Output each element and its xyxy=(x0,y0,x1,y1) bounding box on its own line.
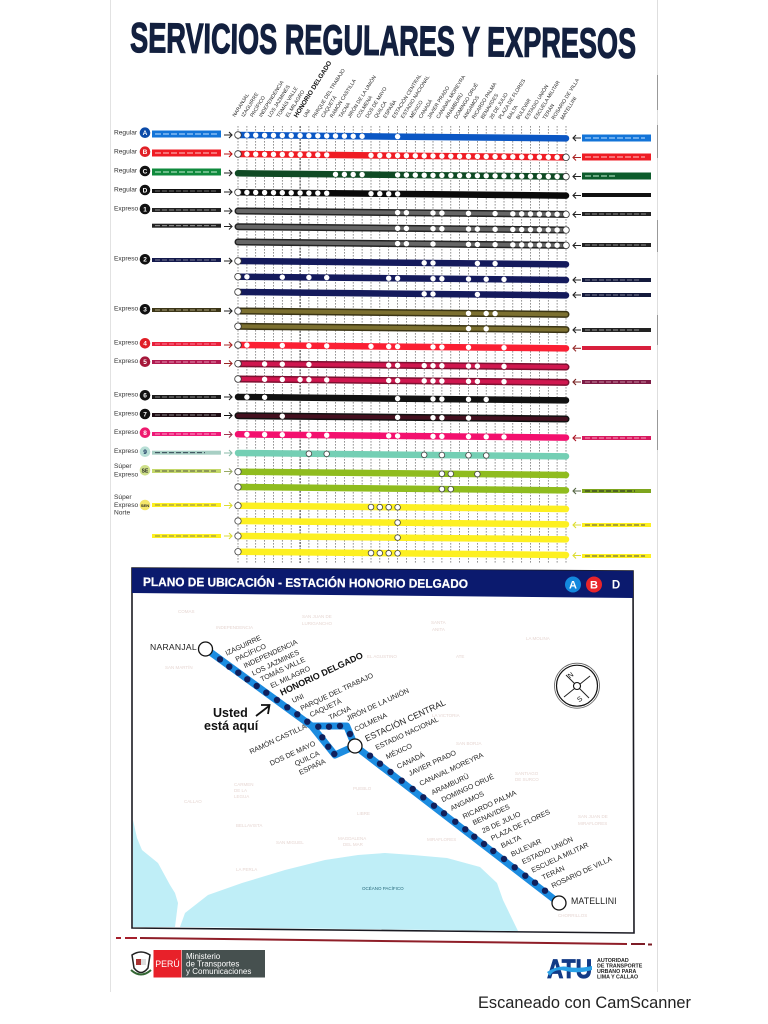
faint district names: MIRAFLORES xyxy=(427,837,456,842)
station column headings xyxy=(232,60,581,121)
map station labels: RAMÓN CASTILLA xyxy=(248,722,308,756)
map station labels: DOS DE MAYO xyxy=(269,739,317,768)
right arrows xyxy=(573,135,581,558)
line B xyxy=(235,151,569,161)
label Super Expreso: Súper xyxy=(114,463,132,470)
map station labels: JIRÓN DE LA UNIÓN xyxy=(345,686,410,723)
label Expreso 8: Expreso xyxy=(114,429,139,436)
map route line xyxy=(198,642,566,910)
station column headings: NARANJAL xyxy=(232,92,251,118)
station column headings: TERÁN xyxy=(541,102,556,121)
label Super Expreso Norte: Norte xyxy=(114,510,130,516)
station column headings: MÉXICO xyxy=(408,99,425,120)
label Expreso 5: 5 xyxy=(143,359,147,366)
express 5 line b xyxy=(235,376,566,386)
express 1 line c xyxy=(238,239,569,249)
label Regular B: Regular xyxy=(114,148,138,156)
map station labels: PACÍFICO xyxy=(234,641,268,664)
logo: ATU xyxy=(547,954,643,984)
label Regular C: Regular xyxy=(114,168,138,174)
station column headings: CANAVAL MOREYRA xyxy=(436,74,467,120)
line A xyxy=(235,132,566,142)
faint district names: SANTIAGO xyxy=(515,771,539,776)
station column headings: INDEPENDENCIA xyxy=(258,79,286,119)
label Regular D: D xyxy=(143,187,148,194)
label Expreso 4: 4 xyxy=(143,341,147,348)
map station labels: PLAZA DE FLORES xyxy=(490,808,552,843)
faint district names: MAGDALENA xyxy=(338,836,366,841)
express 2 line b xyxy=(235,273,566,283)
station column headings: ESPAÑA xyxy=(381,98,398,120)
station column headings: ESTADIO UNIÓN xyxy=(523,83,550,121)
map station labels: DOMINGO ORUÉ xyxy=(440,772,496,804)
label Super Expreso Norte: Expreso xyxy=(114,502,139,509)
station column headings: 28 DE JULIO xyxy=(489,92,510,121)
panel: location map xyxy=(132,568,634,933)
station column headings: TOMÁS VALLE xyxy=(275,85,300,119)
line C xyxy=(238,170,569,180)
map station labels: UNI xyxy=(291,692,305,705)
faint district names: LURIGANCHO xyxy=(302,621,333,626)
map station labels xyxy=(150,634,617,906)
logo: ATU: URBANO PARA xyxy=(597,969,637,975)
station column headings: QUILCA xyxy=(373,100,389,120)
label Regular A: A xyxy=(143,130,148,137)
station column headings: EL MILAGRO xyxy=(285,89,306,119)
faint district names: ANITA xyxy=(432,627,445,632)
label Expreso 9: 9 xyxy=(143,449,147,456)
express 3 line a xyxy=(235,308,566,318)
map station labels: HONORIO DELGADO xyxy=(278,650,365,698)
label Expreso 3: 3 xyxy=(143,307,147,314)
station column headings: ESTADIO NACIONAL xyxy=(400,75,431,120)
label Regular B: B xyxy=(143,149,148,156)
map station labels: ANGAMOS xyxy=(449,790,486,813)
faint district names: BELLAVISTA xyxy=(236,823,262,828)
faint district names: SAN MIGUEL xyxy=(276,840,304,845)
logo: ATU: ATU xyxy=(547,954,592,984)
express 7 line xyxy=(238,413,566,422)
label Expreso 2: 2 xyxy=(143,257,147,264)
map station labels: ARAMBURÚ xyxy=(430,771,470,797)
faint district names: SAN JUAN DE xyxy=(578,814,608,819)
map station labels: BENAVIDES xyxy=(471,803,511,827)
station column headings: UNI xyxy=(303,108,312,119)
map station labels: CANADÁ xyxy=(395,750,426,771)
map header: B xyxy=(590,580,598,592)
label Expreso 9 xyxy=(114,446,150,457)
faint district names: SANTA xyxy=(431,620,446,625)
map header xyxy=(132,568,633,598)
faint district names: LIBRE xyxy=(357,811,370,816)
label Super Expreso: SE xyxy=(142,468,149,474)
map station labels: ESTADIO NACIONAL xyxy=(374,715,440,752)
map station labels: ROSARIO DE VILLA xyxy=(550,855,613,890)
super express norte line c xyxy=(235,533,566,543)
faint district names xyxy=(165,609,608,918)
station column headings: ESCUELA MILITAR xyxy=(533,80,562,121)
station column headings: RICARDO PALMA xyxy=(471,81,499,120)
scanner watermark: Escaneado con CamScanner xyxy=(478,993,691,1012)
faint district names: COMAS xyxy=(178,609,195,614)
map station labels: CAQUETÁ xyxy=(308,696,343,719)
super express norte line a xyxy=(235,502,566,512)
faint district names: CHORRILLOS xyxy=(558,913,587,918)
icon: coat of arms xyxy=(131,952,151,974)
map station labels: ESTADIO UNIÓN xyxy=(520,835,574,866)
compass: N xyxy=(567,671,575,680)
label Expreso 1: Expreso xyxy=(114,206,139,212)
faint district names: DEL MAR xyxy=(343,842,364,847)
super express line b xyxy=(235,484,566,494)
label Super Expreso: Expreso xyxy=(114,472,139,478)
label Expreso 6: Expreso xyxy=(114,392,139,398)
map header: A xyxy=(569,580,577,592)
label Regular A: Regular xyxy=(114,130,138,136)
faint district names: LA PERLA xyxy=(236,867,257,872)
station column headings: MATELLINI xyxy=(560,96,578,121)
express 1 line a xyxy=(238,208,569,218)
label Expreso 9: Expreso xyxy=(114,448,139,455)
label Regular B xyxy=(114,146,150,157)
compass: S xyxy=(576,695,584,704)
logo: Ministerio de Transportes: Ministerio xyxy=(186,952,221,961)
logo: Ministerio de Transportes: PERÚ xyxy=(155,959,180,969)
label Super Expreso Norte xyxy=(114,494,150,516)
station column headings: DOMINGO ORUÉ xyxy=(452,81,480,120)
station column headings: CAQUETÁ xyxy=(319,94,339,119)
callout: you are here: está aquí xyxy=(204,719,259,733)
logo: ATU: AUTORIDAD xyxy=(597,958,629,964)
map station labels: IZAGUIRRE xyxy=(224,634,263,658)
map station labels: CANAVAL MOREYRA xyxy=(418,751,485,788)
station column headings: LOS JAZMINES xyxy=(267,84,292,119)
station column headings: CANADÁ xyxy=(417,98,434,120)
label Expreso 7: Expreso xyxy=(114,410,139,418)
map station labels: EL MILAGRO xyxy=(269,664,312,690)
map station labels: BULEVAR xyxy=(510,837,543,859)
faint district names: MIRAFLORES xyxy=(578,821,607,826)
logo: Ministerio de Transportes: de Transportes xyxy=(186,960,239,968)
faint district names: OCÉANO PACÍFICO xyxy=(362,885,404,891)
left arrows xyxy=(224,132,232,539)
label Expreso 3: Expreso xyxy=(114,306,139,312)
route lines and stops xyxy=(235,132,569,558)
express 3 line b xyxy=(235,323,566,333)
super express line a xyxy=(235,468,566,478)
map station labels: RICARDO PALMA xyxy=(461,789,518,821)
express 1 line b xyxy=(238,223,569,233)
map station labels: ESTACIÓN CENTRAL xyxy=(363,697,447,744)
callout: you are here: Usted xyxy=(213,706,248,720)
station column headings: PARQUE DEL TRABAJO xyxy=(311,68,347,120)
station column headings: COLMENA xyxy=(356,94,374,119)
label Expreso 4 xyxy=(114,338,150,349)
label Expreso 2 xyxy=(114,254,150,265)
map station labels: TACNA xyxy=(327,705,352,722)
map station labels: ESPAÑA xyxy=(297,757,327,777)
footer divider xyxy=(116,938,652,944)
station column headings: ARAMBURÚ xyxy=(444,91,465,120)
faint district names: SAN BORJA xyxy=(456,741,482,746)
label Regular C: C xyxy=(143,168,148,175)
express 5 line a xyxy=(235,360,566,370)
faint district names: LA VICTORIA xyxy=(432,713,460,718)
faint district names: PUEBLO xyxy=(353,786,372,791)
right destination bars xyxy=(582,134,651,558)
label Expreso 7: 7 xyxy=(143,411,147,418)
super express norte line d xyxy=(235,548,566,558)
label Expreso 1: 1 xyxy=(143,206,147,213)
label Expreso 6 xyxy=(114,390,150,401)
faint district names: DE LA xyxy=(234,788,247,793)
station column headings: HONORIO DELGADO xyxy=(293,60,333,119)
label Expreso 5: Expreso xyxy=(114,358,139,365)
station column headings: IZAGUIRRE xyxy=(241,91,261,118)
label Expreso 5 xyxy=(114,356,150,367)
label Expreso 8 xyxy=(114,427,150,438)
map station labels: COLMENA xyxy=(353,711,389,734)
sea xyxy=(133,820,518,931)
station column headings: JAVIER PRADO xyxy=(427,85,451,120)
faint district names: DE SURCO xyxy=(515,777,539,782)
faint district names: SAN JUAN DE xyxy=(302,614,332,619)
logo: ATU: LIMA Y CALLAO xyxy=(597,974,638,980)
map station labels: TOMÁS VALLE xyxy=(259,655,307,684)
express 2 line a xyxy=(235,258,566,268)
map station labels: MÉXICO xyxy=(384,741,414,761)
map station labels: JAVIER PRADO xyxy=(407,749,458,778)
station column headings: ANGAMOS xyxy=(462,94,481,120)
express 2 line c xyxy=(235,289,566,299)
compass xyxy=(554,663,600,708)
service labels and badges xyxy=(114,127,150,516)
faint district names: CALLAO xyxy=(184,799,202,804)
station column headings: PACÍFICO xyxy=(248,95,267,118)
logo: Ministerio de Transportes xyxy=(131,950,265,978)
map station labels: 28 DE JULIO xyxy=(481,810,522,835)
express 9 line xyxy=(238,450,566,459)
express 4 line xyxy=(235,342,566,352)
map station labels: NARANJAL xyxy=(150,642,197,652)
station column headings: JIRÓN DE LA UNIÓN xyxy=(346,74,378,119)
station column headings: BALTA xyxy=(506,104,520,121)
station column headings: ESTACIÓN CENTRAL xyxy=(390,73,423,120)
map station labels: MATELLINI xyxy=(571,896,617,906)
express 6 line xyxy=(238,394,566,403)
label Super Expreso xyxy=(114,463,150,478)
faint district names: CARMEN xyxy=(234,782,254,787)
express 8 line xyxy=(238,432,566,440)
faint district names: LEGUA xyxy=(234,794,249,799)
callout: you are here xyxy=(204,705,270,733)
map station labels: PARQUE DEL TRABAJO xyxy=(299,671,375,713)
station column headings: PLAZA DE FLORES xyxy=(498,78,527,121)
map header: PLANO DE UBICACIÓN - ESTACIÓN HONORIO DELGADO xyxy=(143,574,468,591)
station column headings: BULEVAR xyxy=(515,97,533,121)
station column headings: TACNA xyxy=(338,101,352,119)
faint district names: ATE xyxy=(456,654,464,659)
map station labels: BALTA xyxy=(500,834,523,850)
label Super Expreso Norte: Súper xyxy=(114,494,132,501)
label Expreso 6: 6 xyxy=(143,393,147,400)
label Regular A xyxy=(114,127,150,138)
faint district names: LA MOLINA xyxy=(526,636,550,641)
label Regular D: Regular xyxy=(114,186,138,194)
station column headings: DOS DE MAYO xyxy=(365,86,389,119)
map station labels: QUILCA xyxy=(294,749,321,768)
station column headings: ROSARIO DE VILLA xyxy=(551,77,581,121)
faint district names: EL AGUSTINO xyxy=(367,654,397,659)
station column headings: BENAVIDES xyxy=(480,92,500,120)
faint district names: SAN MARTÍN xyxy=(165,664,193,670)
label Expreso 7 xyxy=(114,409,150,419)
label Expreso 4: Expreso xyxy=(114,340,139,346)
label Super Expreso Norte: SEN xyxy=(141,503,149,508)
label Regular D xyxy=(114,185,150,195)
station column headings: RAMÓN CASTILLA xyxy=(328,77,358,119)
logo: Ministerio de Transportes: y Comunicaciones xyxy=(186,967,251,976)
map station labels: LOS JAZMINES xyxy=(251,648,301,678)
label Expreso 1 xyxy=(114,204,150,214)
label Expreso 3 xyxy=(114,304,150,315)
label Expreso 8: 8 xyxy=(143,430,147,437)
logo: ATU: DE TRANSPORTE xyxy=(597,964,643,970)
left destination bars xyxy=(152,130,221,538)
map station labels: ESCUELA MILITAR xyxy=(530,841,590,875)
map station labels: INDEPENDENCIA xyxy=(242,638,299,670)
map header: D xyxy=(612,580,620,592)
label Regular C xyxy=(114,166,150,176)
map station labels: TERÁN xyxy=(540,863,566,882)
label Expreso 2: Expreso xyxy=(114,256,139,262)
faint district names: INDEPENDENCIA xyxy=(216,625,253,630)
super express norte line b xyxy=(235,518,566,528)
line D xyxy=(235,189,566,199)
